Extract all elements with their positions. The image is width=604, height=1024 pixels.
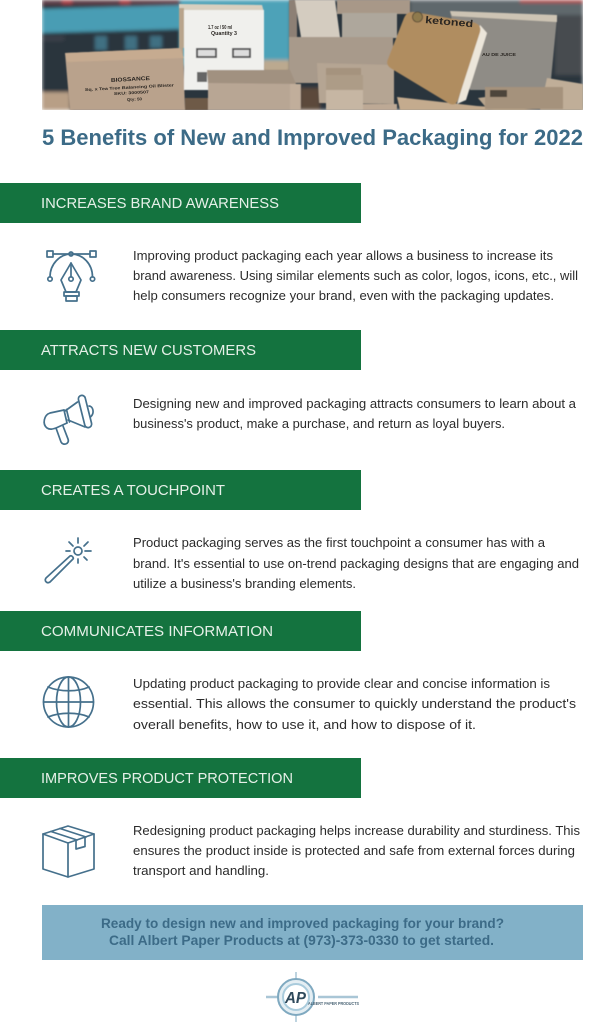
title: 5 Benefits of New and Improved Packaging for 2022 [42, 125, 583, 150]
text: touchpoint: brand. It's essential to use on-trend packaging designs that are engaging and [133, 557, 579, 571]
hero photo: cardboard packaging boxes: SKU: 3000507 [114, 89, 150, 96]
text: protection: transport and handling. [133, 864, 269, 878]
icon: megaphone [44, 395, 93, 444]
hero photo: cardboard packaging boxes: BIOSSANCE [111, 76, 150, 84]
hero photo: cardboard packaging boxes: 1.7 oz / 50 ml [208, 25, 232, 31]
text: brand awareness: brand awareness. Using similar elements such as color, logos, icons, etc., will [133, 269, 578, 283]
text: brand awareness [133, 249, 578, 303]
icon: magic wand [45, 538, 91, 583]
text: protection [133, 824, 580, 878]
text: touchpoint [133, 536, 579, 591]
text: protection: Redesigning product packaging helps increase durability and sturdiness. This [133, 824, 580, 838]
text: protection: ensures the product inside is protected and safe from external forces during [133, 844, 575, 858]
text: touchpoint: utilize a business's branding elements. [133, 577, 356, 591]
call to action banner: Ready to design new and improved packaging for your brand? [101, 916, 504, 931]
text: touchpoint: Product packaging serves as the first touchpoint a consumer has with a [133, 536, 545, 550]
icon: pen tool [47, 251, 96, 301]
text: attracts customers: business's product, make a purchase, and return as loyal buyers. [133, 417, 505, 431]
text: information: essential. This allows the consumer to quickly understand the product's [133, 697, 576, 711]
section header: increases brand awareness: INCREASES BRAND AWARENESS [41, 196, 279, 212]
call to action banner: Call Albert Paper Products at (973)-373-0330 to get started. [109, 933, 494, 948]
logo: Albert Paper Products: AP [284, 990, 306, 1007]
hero photo: cardboard packaging boxes: AU DE JUICE [482, 52, 516, 57]
section header: creates a touchpoint [0, 470, 361, 510]
section header: creates a touchpoint: CREATES A TOUCHPOINT [41, 483, 225, 499]
section header: improves product protection: IMPROVES PRODUCT PROTECTION [41, 771, 293, 787]
hero photo: cardboard packaging boxes: ketoned [425, 15, 474, 30]
logo: Albert Paper Products: ALBERT PAPER PRODUCTS [308, 1001, 359, 1006]
hero photo: cardboard packaging boxes [42, 0, 583, 110]
icon: globe [44, 677, 94, 727]
section header: attracts new customers: ATTRACTS NEW CUSTOMERS [41, 343, 256, 359]
hero photo: cardboard packaging boxes: Qty: 50 [127, 96, 143, 102]
hero photo: cardboard packaging boxes: Sq. x Tea Tree Balancing Oil Blister [85, 82, 175, 92]
icon: box [43, 826, 94, 877]
section header: attracts new customers [0, 330, 361, 370]
logo: Albert Paper Products [266, 972, 359, 1022]
text: information: overall benefits, how to use it, and how to dispose of it. [133, 718, 476, 732]
section header: communicates information: COMMUNICATES INFORMATION [41, 624, 273, 640]
text: information [133, 677, 576, 732]
text: information: Updating product packaging to provide clear and concise information is [133, 677, 550, 691]
call to action banner [42, 905, 583, 960]
hero photo: cardboard packaging boxes: Quantity 3 [211, 31, 237, 37]
text: brand awareness: Improving product packaging each year allows a business to increase its [133, 249, 553, 263]
section header: increases brand awareness [0, 183, 361, 223]
text: attracts customers [133, 397, 576, 431]
text: brand awareness: help consumers recognize your brand, even with the packaging updates. [133, 289, 554, 303]
text: attracts customers: Designing new and improved packaging attracts consumers to learn about a [133, 397, 576, 411]
section header: communicates information [0, 611, 361, 651]
section header: improves product protection [0, 758, 361, 798]
